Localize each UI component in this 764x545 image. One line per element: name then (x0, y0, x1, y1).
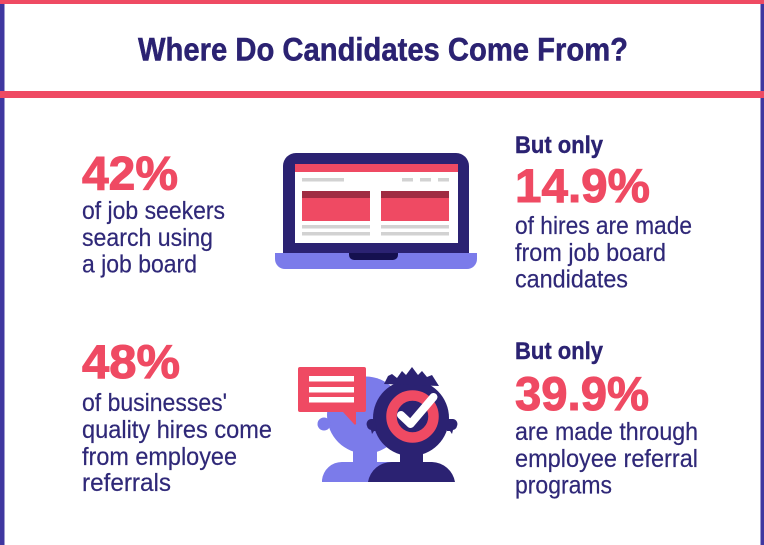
stat: hires from job boards (515, 132, 692, 294)
stat: job seekers using a job board (82, 146, 225, 278)
stat: job seekers using a job board: a job board (82, 250, 197, 278)
stat: hires from employee referrals: 39.9% (515, 367, 649, 420)
stat: hires from employee referrals: programs (515, 472, 612, 500)
stat: hires from job boards: candidates (515, 266, 628, 294)
stat: quality hires from referrals: of businesses' (82, 389, 227, 417)
stat: hires from job boards: of hires are made (515, 212, 692, 240)
stat: quality hires from referrals (82, 335, 272, 497)
icon: employee referral people (298, 367, 457, 482)
stat: hires from employee referrals: employee referral (515, 445, 698, 473)
stat: hires from employee referrals: are made through (515, 418, 698, 446)
title: Where Do Candidates Come From? (138, 32, 628, 68)
stat: hires from job boards: 14.9% (515, 159, 650, 212)
stat: hires from employee referrals (515, 338, 698, 500)
stat: quality hires from referrals: referrals (82, 469, 171, 497)
stat: job seekers using a job board: 42% (82, 146, 178, 200)
stat: quality hires from referrals: 48% (82, 335, 180, 388)
icon: light figure (318, 376, 404, 482)
icon: laptop (275, 153, 477, 269)
stat: hires from job boards: from job board (515, 239, 666, 267)
icon: speech bubble (298, 367, 366, 425)
stat: quality hires from referrals: from employee (82, 443, 237, 471)
icon: dark figure with check (367, 367, 457, 482)
stat: hires from employee referrals: But only (515, 338, 604, 365)
stat: hires from job boards: But only (515, 132, 604, 159)
stat: job seekers using a job board: of job seekers (82, 197, 225, 225)
stat: job seekers using a job board: search using (82, 224, 213, 252)
stat: quality hires from referrals: quality hires come (82, 416, 272, 444)
